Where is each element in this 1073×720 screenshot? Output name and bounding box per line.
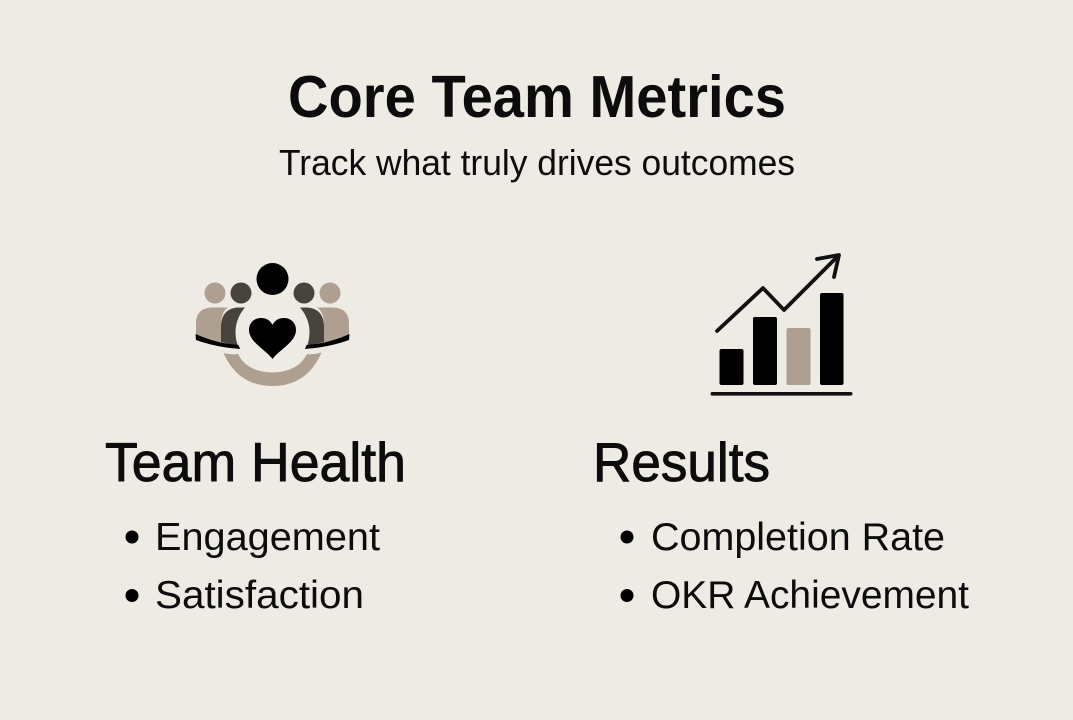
list: results: OKR Achievement xyxy=(651,574,969,617)
bars xyxy=(720,293,844,385)
list: results xyxy=(620,516,969,617)
list: team health: Engagement xyxy=(155,516,380,559)
arrow: growth trend xyxy=(717,255,839,331)
icon: team health xyxy=(196,263,350,386)
subtitle: Track what truly drives outcomes xyxy=(279,142,795,183)
title: Core Team Metrics xyxy=(288,64,786,130)
icon: results chart xyxy=(710,255,852,396)
heading: results: Results xyxy=(593,431,770,493)
list: team health: Satisfaction xyxy=(155,574,364,617)
list: team health xyxy=(126,516,380,617)
heading: team health: Team Health xyxy=(105,431,406,493)
list: results: Completion Rate xyxy=(651,516,945,559)
